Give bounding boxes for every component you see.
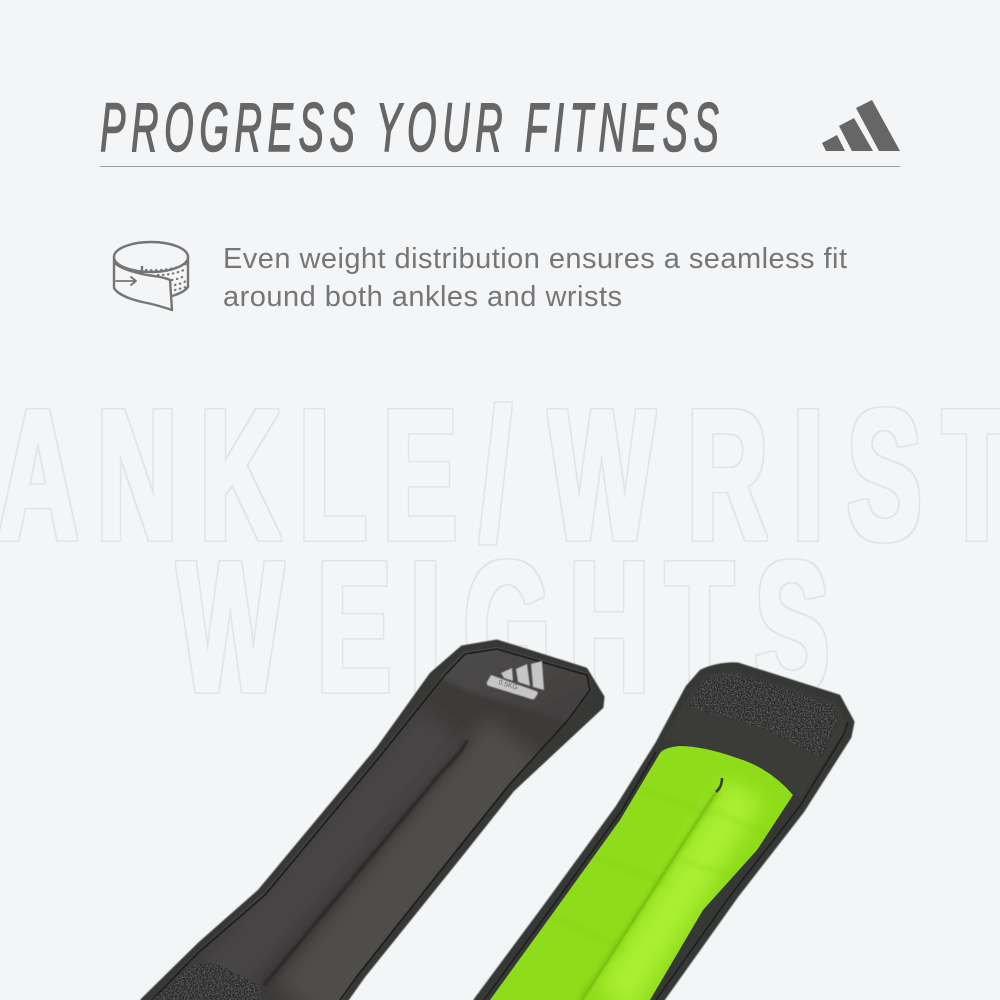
band outer border xyxy=(475,664,853,1000)
left weight: dark side xyxy=(140,640,603,1000)
panel base fabric xyxy=(140,640,600,1000)
right padded lobe xyxy=(305,740,515,1000)
right weight: green side xyxy=(475,664,853,1000)
icon: small reflective logo xyxy=(487,661,544,699)
green base fabric xyxy=(480,740,800,1000)
logo tab xyxy=(443,647,569,705)
title: PROGRESS YOUR FITNESS xyxy=(100,89,719,166)
band inner seam line xyxy=(152,649,590,1000)
weight label: 0.5KG xyxy=(497,679,518,692)
background outlined title: ANKLE/WRIST WEIGHTS xyxy=(0,370,1000,731)
band outer border xyxy=(142,641,603,1000)
center seam valley xyxy=(264,740,467,985)
left padded lobe xyxy=(215,725,440,985)
inner seam line xyxy=(484,722,848,1000)
velcro loop panel xyxy=(663,671,846,800)
seam valley xyxy=(580,790,718,1000)
green padding xyxy=(480,740,800,1000)
fabric wrinkles xyxy=(550,790,775,950)
right lobe highlight xyxy=(615,790,745,1000)
background outlined title: ANKLE/WRIST WEIGHTS: WEIGHTS xyxy=(178,522,829,731)
seam shadow xyxy=(582,786,720,1000)
feature description: around both ankles and wrists xyxy=(223,281,622,313)
feature description: Even weight distribution ensures a seamless fit xyxy=(223,243,847,275)
seam notch xyxy=(716,778,722,792)
feature description xyxy=(223,243,847,313)
icon: adidas logo xyxy=(822,100,900,151)
background outlined title: ANKLE/WRIST WEIGHTS: ANKLE/WRIST xyxy=(0,370,1000,579)
velcro hook patch xyxy=(688,673,838,757)
header divider xyxy=(100,166,900,167)
icon: wrap band xyxy=(114,242,188,310)
padded panel xyxy=(186,647,592,1000)
velcro strap xyxy=(152,963,262,1000)
center seam xyxy=(264,740,467,985)
